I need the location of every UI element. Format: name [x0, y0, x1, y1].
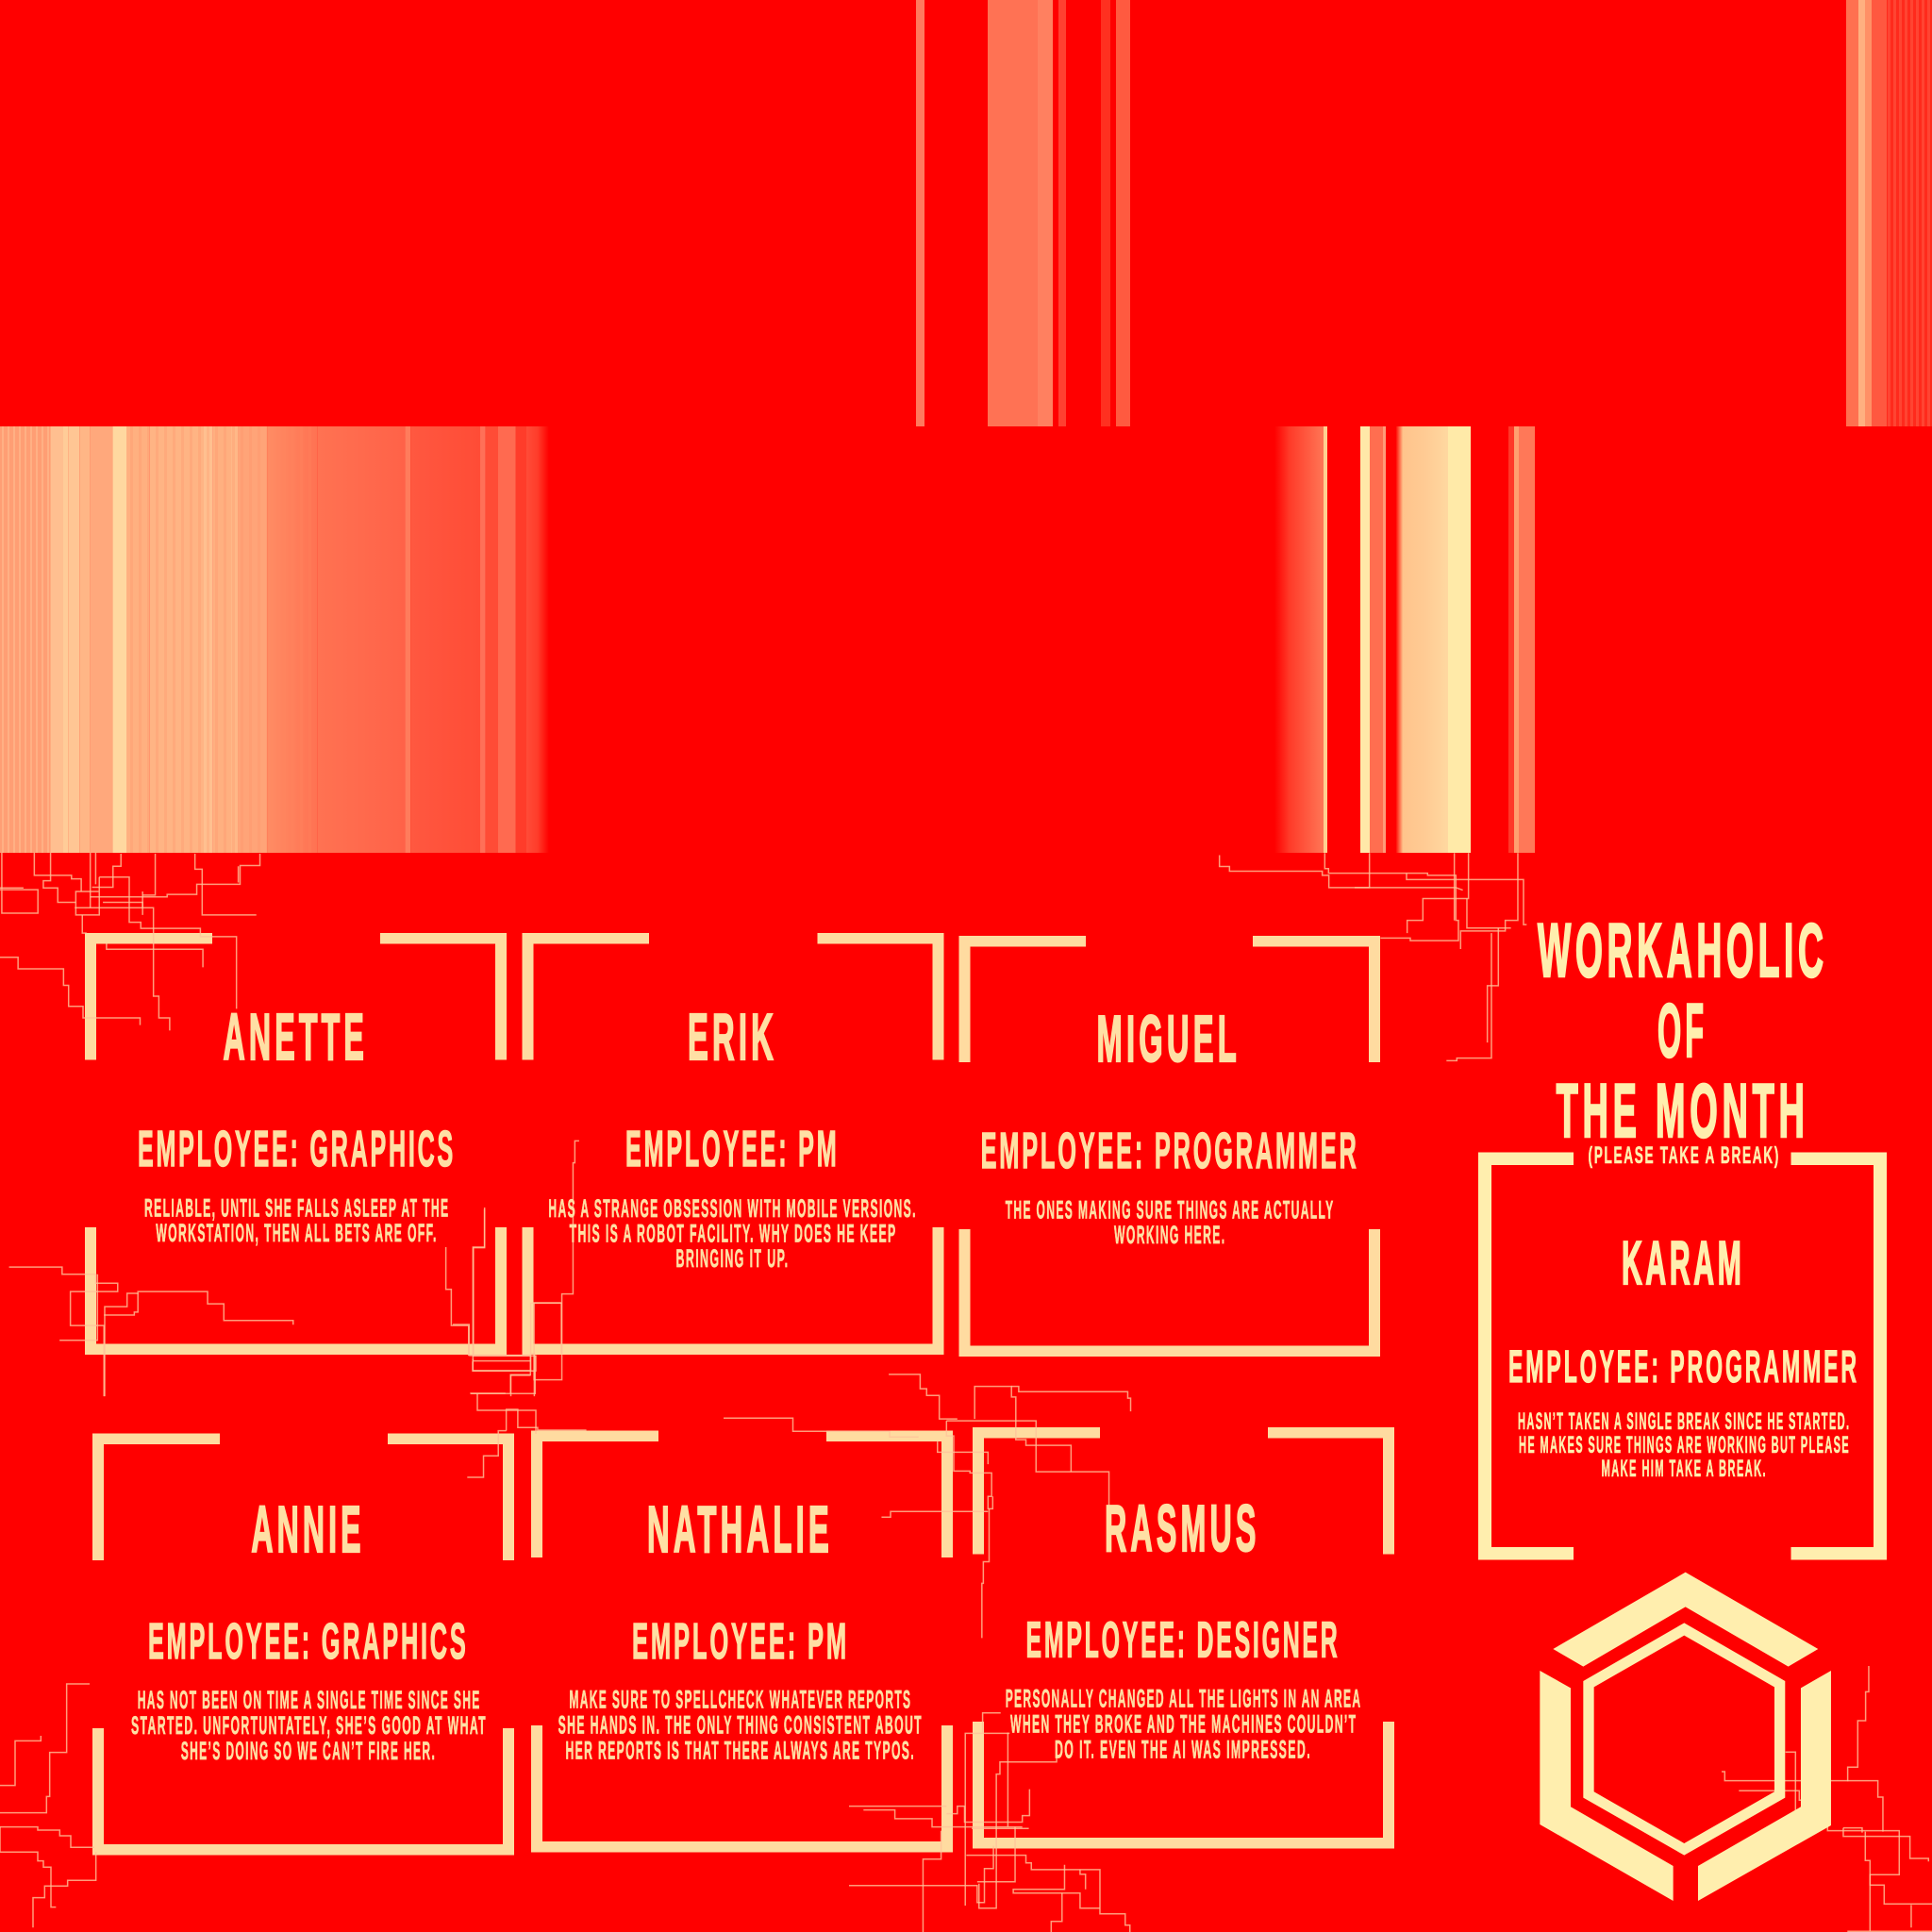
text: PERSONALLY CHANGED ALL THE LIGHTS IN AN AREA	[1006, 1685, 1361, 1713]
text block: Annie: ANNIE	[251, 1492, 365, 1566]
title: Workaholic of the Month: OF	[1657, 989, 1707, 1074]
panel frame: Miguel	[958, 936, 1380, 1357]
text block: Nathalie	[558, 1492, 923, 1764]
panel frame: Nathalie	[531, 1430, 953, 1853]
text block: Erik	[548, 1000, 917, 1273]
glitch bands: top row	[916, 0, 1932, 426]
text block: Anette	[138, 1000, 456, 1247]
text: THIS IS A ROBOT FACILITY. WHY DOES HE KEEP	[570, 1219, 897, 1247]
circuit traces: lower centre	[849, 1374, 1131, 1932]
text: EMPLOYEE: GRAPHICS	[138, 1121, 456, 1177]
text block: Erik: BRINGING IT UP.	[675, 1244, 789, 1273]
panel frame: Rasmus	[973, 1427, 1394, 1849]
text: HAS A STRANGE OBSESSION WITH MOBILE VERSIONS.	[548, 1194, 917, 1223]
circuit traces: bottom left	[0, 1684, 96, 1927]
glitch bands: left middle row	[0, 426, 549, 853]
title: Workaholic of the Month	[1538, 908, 1828, 1154]
text block: Miguel: WORKING HERE.	[1114, 1221, 1226, 1249]
text: MAKE SURE TO SPELLCHECK WHATEVER REPORTS	[569, 1685, 911, 1713]
text block: Nathalie: EMPLOYEE: PM	[632, 1613, 849, 1670]
text: HAS NOT BEEN ON TIME A SINGLE TIME SINCE SHE	[138, 1686, 481, 1714]
text block: Erik: ERIK	[688, 1000, 777, 1074]
text block: Annie: SHE’S DOING SO WE CAN’T FIRE HER.	[181, 1737, 436, 1765]
circuit traces: top left	[0, 853, 561, 1396]
circuit traces: bottom right	[1722, 1666, 1932, 1931]
text: EMPLOYEE: GRAPHICS	[148, 1613, 468, 1670]
circuit traces: centre	[453, 1141, 919, 1477]
text block: Rasmus: RASMUS	[1105, 1491, 1260, 1565]
text: STARTED. UNFORTUNTATELY, SHE’S GOOD AT WHAT	[131, 1711, 487, 1740]
text: HER REPORTS IS THAT THERE ALWAYS ARE TYPOS.	[566, 1736, 915, 1764]
text block: Anette: ANETTE	[223, 1000, 368, 1074]
subtitle: please take a break: (PLEASE TAKE A BREAK)	[1589, 1142, 1780, 1169]
text block: Karam: KARAM	[1622, 1228, 1745, 1297]
circuit traces: upper right	[1220, 853, 1526, 1060]
icon: hexagon logo	[1540, 1573, 1831, 1901]
text block: Rasmus	[1006, 1491, 1361, 1763]
text block: Annie	[131, 1492, 487, 1765]
text block: Miguel	[981, 1002, 1359, 1249]
text block: Rasmus: DO IT. EVEN THE AI WAS IMPRESSED.	[1055, 1735, 1311, 1763]
panel frame: Karam	[1478, 1153, 1887, 1560]
panel frame: Anette	[85, 933, 507, 1355]
text: WORKSTATION, THEN ALL BETS ARE OFF.	[156, 1219, 438, 1247]
text: RELIABLE, UNTIL SHE FALLS ASLEEP AT THE	[144, 1194, 449, 1223]
text block: Erik: EMPLOYEE: PM	[625, 1121, 840, 1177]
text: EMPLOYEE: DESIGNER	[1026, 1611, 1340, 1668]
text block: Karam	[1508, 1228, 1859, 1482]
text block: Miguel: MIGUEL	[1096, 1002, 1241, 1075]
text: THE ONES MAKING SURE THINGS ARE ACTUALLY	[1006, 1196, 1334, 1224]
panel frame: Annie	[92, 1434, 514, 1855]
text: EMPLOYEE: PROGRAMMER	[981, 1123, 1359, 1179]
text block: Nathalie: NATHALIE	[647, 1492, 833, 1566]
text: SHE HANDS IN. THE ONLY THING CONSISTENT ABOUT	[558, 1711, 923, 1740]
text: WHEN THEY BROKE AND THE MACHINES COULDN’T	[1010, 1709, 1357, 1738]
panel frame: Erik	[523, 933, 943, 1355]
glitch bands: right middle row	[1274, 426, 1535, 853]
